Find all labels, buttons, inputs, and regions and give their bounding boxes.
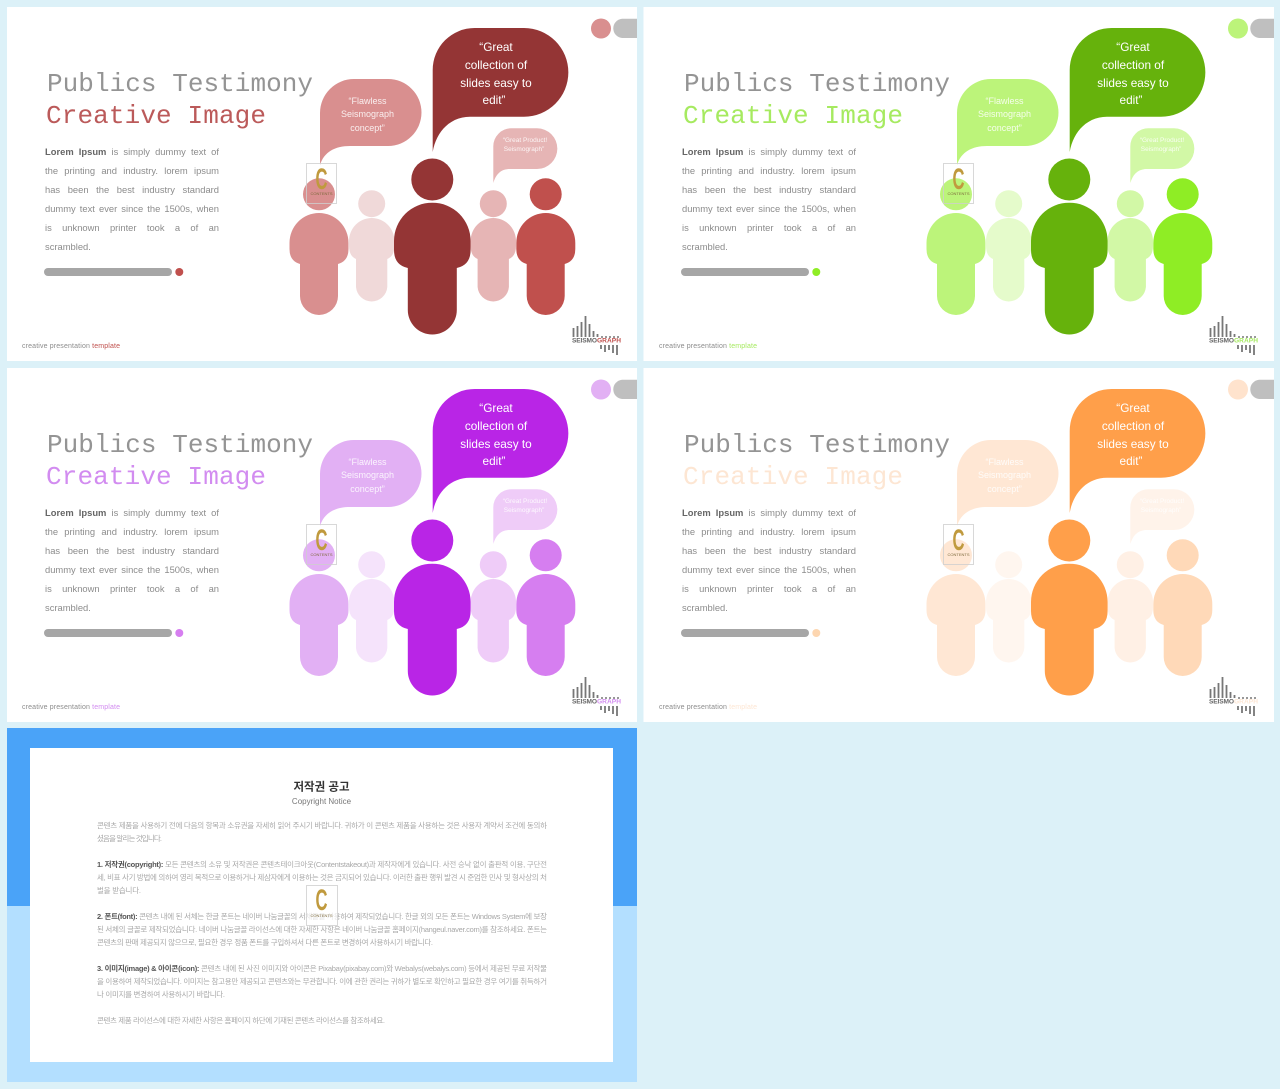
speech bubble: great product	[1130, 489, 1194, 544]
logo: seismograph: GRAPH	[597, 698, 621, 706]
title	[683, 69, 950, 131]
progress bar	[681, 629, 820, 637]
title	[46, 69, 313, 131]
text block: lorem ipsum: dummy text ever since the 1500s, when	[45, 564, 219, 574]
speech bubble: great product: “Great Product!	[503, 137, 547, 144]
speech bubble: great collection: “Great	[479, 401, 513, 415]
watermark: C	[316, 163, 328, 196]
watermark	[306, 163, 336, 204]
text block: lorem ipsum: Lorem Ipsum is simply dummy text of	[682, 506, 856, 518]
title: Publics Testimony	[47, 69, 313, 99]
copyright section 1: 벌을 받습니다.	[97, 885, 141, 895]
speech bubble: flawless: “Flawless	[348, 457, 387, 467]
speech bubble: great collection: “Great	[1116, 40, 1150, 54]
speech bubble: great collection: edit”	[483, 454, 506, 468]
speech bubble: great product: Seismograph”	[504, 146, 544, 153]
footer text: creative presentation template	[659, 704, 757, 711]
copyright heading: 저작권 공고	[293, 780, 350, 794]
text block: lorem ipsum: is unknown printer took a of an	[682, 582, 856, 594]
title: Creative Image	[683, 101, 903, 131]
text block: lorem ipsum: has been the best industry standard	[45, 184, 219, 194]
title	[46, 430, 313, 492]
text block: lorem ipsum: is unknown printer took a of an	[45, 582, 219, 594]
person 4	[471, 190, 516, 301]
text block: lorem ipsum: Lorem Ipsum is simply dummy text of	[45, 506, 219, 518]
logo: seismograph: SEISMO	[572, 698, 597, 706]
speech bubble: flawless: concept”	[350, 484, 385, 494]
copyright section 1: 1. 저작권(copyright): 모든 콘텐츠의 소유 및 저작권은 콘텐츠테이크아웃(Contentstakeout)과 제작자에게 있습니다. 사전 승낙 없이 출판적 이용, 구단전	[97, 859, 547, 869]
speech bubble: great collection: collection of	[465, 58, 528, 72]
person 3	[394, 158, 471, 334]
panel: orange slide	[644, 368, 1274, 722]
top-right tab icons	[591, 380, 637, 400]
speech bubble: flawless	[320, 79, 421, 165]
watermark: C	[316, 884, 328, 917]
logo: seismograph: SEISMO	[1209, 338, 1234, 344]
copyright intro: 셨음을 알리는 것입니다.	[97, 833, 162, 843]
speech bubble: great product: Seismograph”	[1141, 507, 1181, 514]
text block: lorem ipsum: the printing and industry. lorem ipsum	[45, 164, 219, 176]
copyright section 2: 2. 폰트(font): 콘텐츠 내에 된 서체는 한글 폰트는 네이버 나눔글꼴의 서체들을 사용하여 제작되었습니다. 한글 외의 모든 폰트는 Windows System에 보장	[97, 911, 547, 921]
speech bubble: great collection: “Great	[1116, 401, 1150, 415]
logo: seismograph: GRAPH	[597, 338, 621, 344]
copyright section 3: 을 이용하여 제작되었습니다. 이미지는 참고용만 제공되고 콘텐츠와는 무관합니다. 이에 관한 권리는 귀하가 별도로 확인하고 필요한 경우 여기를 취득하거	[97, 976, 547, 986]
person 1	[290, 539, 348, 676]
speech bubble: great collection: slides easy to	[460, 76, 532, 90]
copyright intro: 콘텐츠 제품을 사용하기 전에 다음의 항목과 소유권을 자세히 읽어 주시기 바랍니다. 귀하가 이 콘텐츠 제품을 사용하는 것은 사용자 계약서 조건에 동의하	[97, 820, 547, 830]
text block: lorem ipsum: has been the best industry standard	[682, 184, 856, 194]
speech bubble: great collection	[1070, 389, 1205, 513]
speech bubble: great product: “Great Product!	[1140, 137, 1184, 144]
speech bubble: great collection: collection of	[1102, 419, 1165, 433]
top-right tab icons	[1228, 380, 1274, 400]
person 2	[986, 551, 1031, 662]
copyright section 3: 3. 이미지(image) & 아이콘(icon): 콘텐츠 내에 된 사진 이미지와 아이콘은 Pixabay(pixabay.com)와 Webalys(webalys.com) 등에서 제공된 무료 저작물	[97, 963, 547, 973]
speech bubble: flawless	[957, 440, 1058, 526]
footer text: creative presentation template	[22, 343, 120, 350]
title: Publics Testimony	[684, 430, 950, 460]
person 5	[516, 178, 575, 315]
text block: lorem ipsum: Lorem Ipsum is simply dummy text of	[45, 146, 219, 156]
person 4	[471, 551, 516, 662]
speech bubble: great collection	[433, 28, 568, 152]
progress bar	[681, 268, 820, 276]
speech bubble: flawless: concept”	[350, 123, 385, 133]
watermark: CONTENTS	[948, 552, 970, 557]
copyright section 1: 세, 비표 사기 방법에 의하여 영리 목적으로 이용하거나 제삼자에게 이용하는 것은 금지되어 있습니다. 이러한 출판 행위 발견 시 준엄한 민사 및 형사상의 처	[97, 872, 547, 882]
logo: seismograph	[1209, 677, 1258, 716]
logo: seismograph: SEISMO	[572, 338, 597, 344]
progress bar	[44, 268, 183, 276]
speech bubble: great collection	[1070, 28, 1205, 152]
speech bubble: great collection: edit”	[483, 93, 506, 107]
watermark: C	[952, 524, 964, 557]
title: Publics Testimony	[684, 69, 950, 99]
speech bubble: flawless: concept”	[987, 484, 1022, 494]
text block: lorem ipsum: the printing and industry. lorem ipsum	[45, 526, 219, 536]
watermark: CONTENTS	[310, 191, 333, 196]
person 1	[290, 178, 348, 315]
speech bubble: flawless: “Flawless	[348, 96, 387, 106]
text block: lorem ipsum: dummy text ever since the 1500s, when	[682, 202, 856, 214]
person 2	[349, 190, 394, 301]
logo: seismograph	[1209, 316, 1258, 355]
person 1	[926, 539, 986, 676]
title: Creative Image	[46, 101, 266, 131]
speech bubble: great product: “Great Product!	[1140, 498, 1184, 505]
panel: green slide	[644, 7, 1274, 361]
speech bubble: flawless: Seismograph	[978, 470, 1031, 480]
speech bubble: great product: “Great Product!	[503, 498, 547, 505]
watermark: CONTENTS	[948, 191, 970, 196]
watermark	[944, 163, 974, 204]
text block: lorem ipsum: scrambled.	[682, 602, 728, 612]
title: Publics Testimony	[47, 430, 313, 460]
person 3	[1031, 158, 1108, 334]
watermark	[306, 524, 336, 564]
copyright section 2: 콘텐츠의 판매 제공되지 않으므로, 필요한 경우 정품 폰트를 구입하셔서 다른 폰트로 변경하여 사용하시기 바랍니다.	[97, 937, 433, 947]
speech bubble: great product	[1130, 128, 1194, 183]
speech bubble: great product	[493, 489, 557, 544]
logo: seismograph	[572, 677, 621, 716]
text block: lorem ipsum: scrambled.	[45, 602, 91, 612]
logo: seismograph	[572, 316, 621, 355]
text block: lorem ipsum	[682, 146, 856, 252]
footer text: creative presentation template	[22, 704, 120, 711]
speech bubble: great product: Seismograph”	[504, 507, 544, 514]
speech bubble: flawless: Seismograph	[341, 470, 394, 480]
watermark: CONTENTS	[310, 552, 333, 557]
person 3	[1031, 520, 1108, 696]
text block: lorem ipsum: is unknown printer took a of an	[45, 222, 219, 232]
text block: lorem ipsum: scrambled.	[682, 240, 728, 252]
text block: lorem ipsum	[45, 506, 219, 612]
speech bubble: great collection: collection of	[465, 419, 528, 433]
person 5	[1153, 539, 1212, 676]
speech bubble: flawless	[957, 79, 1058, 165]
speech bubble: great collection: slides easy to	[1097, 76, 1169, 90]
copyright section 1	[97, 859, 547, 895]
watermark: C	[316, 524, 328, 557]
copyright intro	[97, 820, 547, 843]
person 5	[1153, 178, 1212, 315]
top-right tab icons	[591, 18, 637, 38]
top-right tab icons	[1228, 18, 1274, 38]
copyright section 2: 된 서체의 글꼴로 제작되었습니다. 네이버 나눔글꼴 라이선스에 대한 자세한 사항은 네이버 나눔글꼴 홈페이지(hangeul.naver.com)를 참조하세요. 폰트는	[97, 924, 547, 934]
text block: lorem ipsum: scrambled.	[45, 240, 91, 252]
speech bubble: great collection: “Great	[479, 40, 513, 54]
title: Creative Image	[683, 462, 903, 492]
person 3	[394, 520, 471, 696]
person 4	[1108, 551, 1153, 662]
copyright section 3: 나 이미지를 변경하여 사용하시기 바랍니다.	[97, 989, 225, 999]
speech bubble: flawless: “Flawless	[985, 457, 1024, 467]
text block: lorem ipsum: has been the best industry standard	[682, 544, 856, 556]
speech bubble: flawless: concept”	[987, 123, 1022, 133]
speech bubble: great collection: edit”	[1120, 93, 1143, 107]
speech bubble: flawless: Seismograph	[341, 109, 394, 119]
person 2	[986, 190, 1031, 301]
speech bubble: great collection: slides easy to	[460, 437, 532, 451]
text block: lorem ipsum: the printing and industry. lorem ipsum	[682, 164, 856, 176]
speech bubble: flawless	[320, 440, 421, 526]
copyright section 3	[97, 963, 547, 999]
person 2	[349, 551, 394, 662]
person 1	[926, 178, 986, 315]
speech bubble: great product	[493, 128, 557, 183]
text block: lorem ipsum: the printing and industry. lorem ipsum	[682, 526, 856, 536]
copyright heading: Copyright Notice	[292, 797, 352, 806]
logo: seismograph: SEISMO	[1209, 698, 1234, 706]
text block: lorem ipsum: has been the best industry standard	[45, 544, 219, 556]
speech bubble: flawless: “Flawless	[985, 96, 1024, 106]
person 4	[1108, 190, 1153, 301]
speech bubble: flawless: Seismograph	[978, 109, 1031, 119]
logo: seismograph: GRAPH	[1234, 698, 1258, 706]
watermark: CONTENTS	[310, 913, 333, 918]
text block: lorem ipsum: is unknown printer took a of an	[682, 222, 856, 232]
speech bubble: great collection: slides easy to	[1097, 437, 1169, 451]
text block: lorem ipsum: dummy text ever since the 1500s, when	[682, 564, 856, 574]
text block: lorem ipsum	[45, 146, 219, 252]
copyright closing line: 콘텐츠 제품 라이선스에 대한 자세한 사항은 홈페이지 하단에 기재된 콘텐츠 라이선스를 참조하세요.	[97, 1015, 385, 1025]
person 5	[516, 539, 575, 676]
speech bubble: great product: Seismograph”	[1141, 146, 1181, 153]
progress bar	[44, 629, 183, 637]
copyright heading	[292, 780, 352, 806]
speech bubble: great collection: collection of	[1102, 58, 1165, 72]
watermark: C	[952, 163, 964, 196]
text block: lorem ipsum: dummy text ever since the 1500s, when	[45, 202, 219, 214]
panel: purple slide	[7, 368, 637, 722]
panel: red slide	[7, 7, 637, 361]
title: Creative Image	[46, 462, 266, 492]
speech bubble: great collection	[433, 389, 568, 513]
copyright section 2	[97, 911, 547, 947]
speech bubble: great collection: edit”	[1120, 454, 1143, 468]
text block: lorem ipsum	[682, 506, 856, 612]
panel: copyright notice	[7, 728, 637, 1082]
footer text: creative presentation template	[659, 343, 757, 350]
title	[683, 430, 950, 492]
text block: lorem ipsum: Lorem Ipsum is simply dummy text of	[682, 146, 856, 156]
watermark	[944, 524, 974, 564]
logo: seismograph: GRAPH	[1234, 338, 1258, 344]
watermark	[306, 884, 338, 926]
